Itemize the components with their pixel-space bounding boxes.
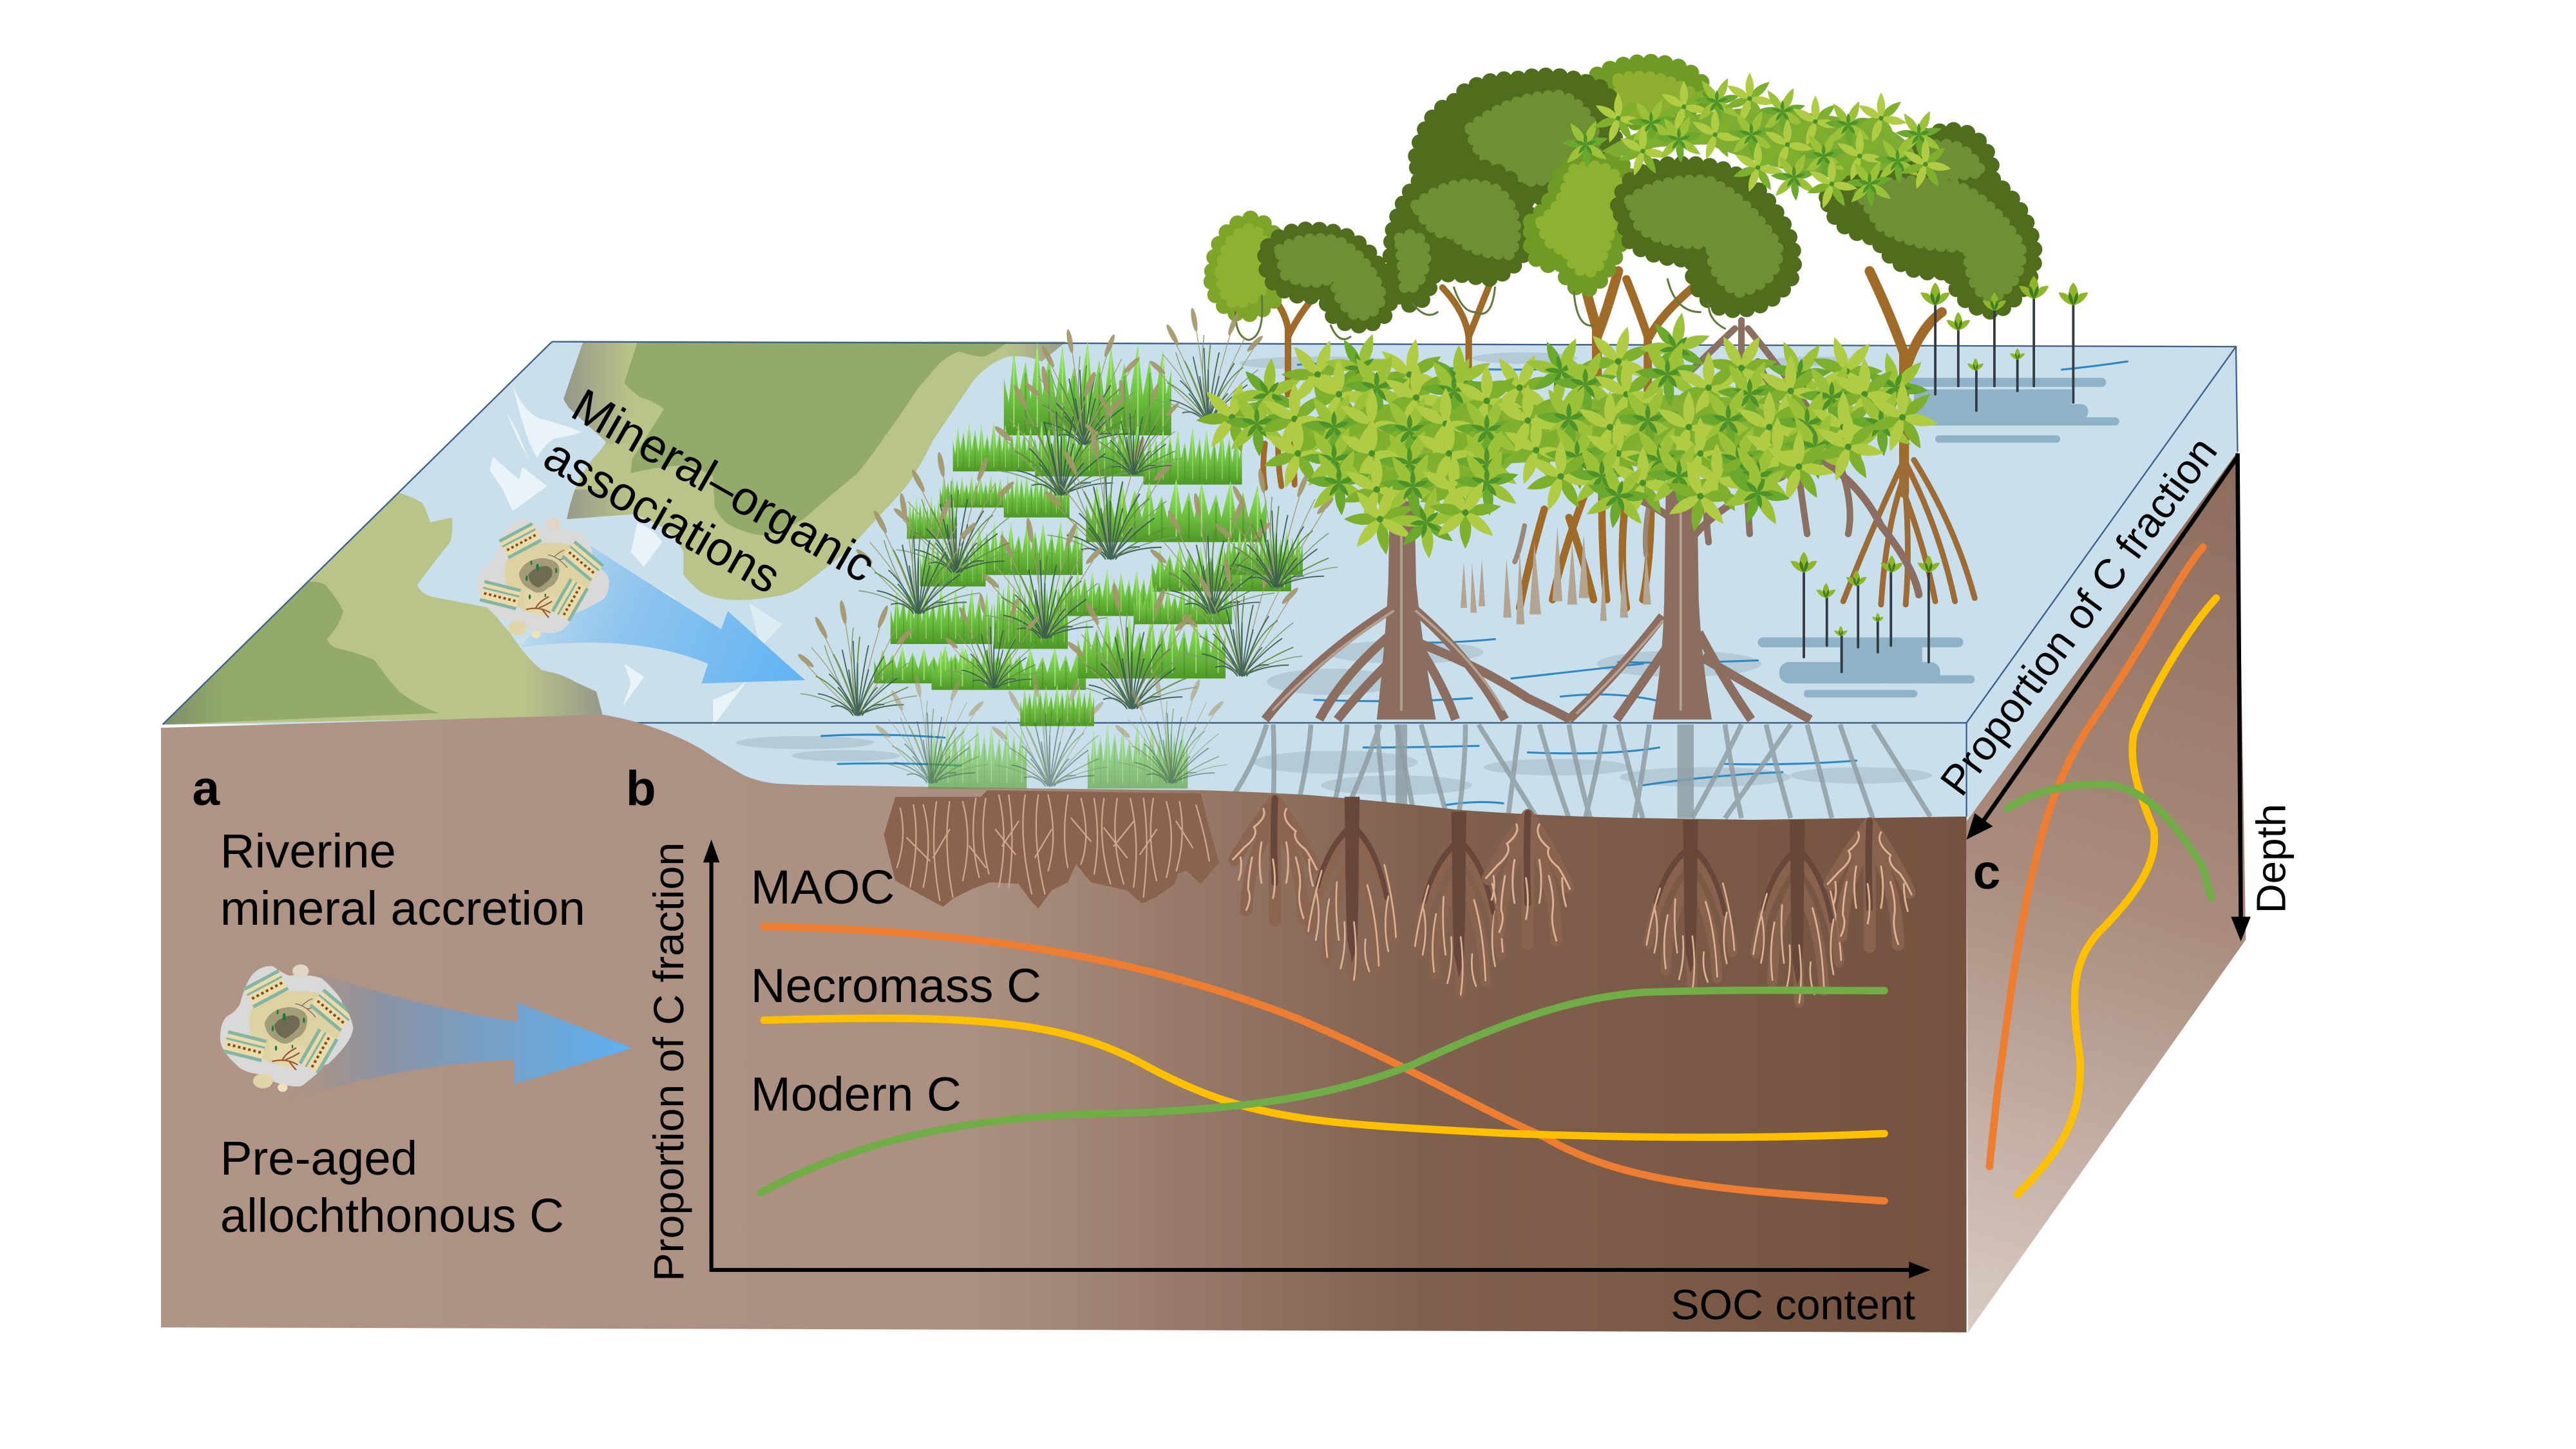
- seedlings: back right: [1920, 276, 2088, 411]
- land: upper bank: [558, 342, 1071, 600]
- foreground mangrove canopy leaves: [1188, 300, 1939, 569]
- text: mineral-organic associations: Mineral–organic: [564, 378, 884, 592]
- y axis title: Proportion of C fraction: [645, 842, 693, 1282]
- foreground mangrove trunks and roots: [1265, 452, 1919, 719]
- canopy: big top dark: [1416, 76, 1615, 201]
- water reflections of roots: [1224, 724, 1930, 818]
- puddles: front right: [1758, 638, 1975, 697]
- icon: mineral-organic aggregate on surface: [480, 518, 605, 638]
- seedlings: front right: [1790, 552, 1940, 672]
- curve: Modern C: [761, 990, 1884, 1193]
- icon: mineral-organic aggregate in soil: [223, 964, 355, 1092]
- grass marsh: [797, 308, 1338, 788]
- panel b label: b: [626, 761, 656, 816]
- curve: MAOC depth: [1989, 547, 2203, 1166]
- text: mineral-organic associations: associations: [535, 428, 790, 604]
- reed tufts in water: [874, 674, 1227, 786]
- text: riverine mineral accretion: mineral accretion: [220, 882, 585, 935]
- chart c: depth profile: [1931, 428, 2294, 1195]
- grass in shallow water: [928, 720, 1188, 788]
- label: Modern C: Modern C: [751, 1067, 961, 1121]
- depth axis title: Depth: [2248, 804, 2294, 913]
- panel c label: c: [1973, 845, 2000, 900]
- y axis: [703, 840, 719, 1271]
- water outline edges: [163, 342, 2237, 817]
- arrow: depth axis: [2231, 453, 2251, 942]
- mangrove roots underground: [1233, 797, 1911, 1003]
- vines: [1235, 279, 1725, 340]
- block side face c: [1967, 448, 2246, 1332]
- water surface top: [163, 342, 2236, 724]
- label: Necromass C: Necromass C: [751, 959, 1041, 1012]
- canopy: far left dark: [1265, 230, 1390, 325]
- chart b: SOC content vs proportion: [645, 840, 1930, 1329]
- text: pre-aged allochthonous C: Pre-aged: [220, 1132, 417, 1185]
- blue flow arrow on water surface: [521, 545, 805, 683]
- text: riverine mineral accretion: Riverine: [220, 824, 396, 878]
- land: lower-left bank: [163, 493, 606, 726]
- top arching canopy leaves: [1562, 73, 1952, 210]
- water side strip right: [1967, 346, 2237, 822]
- grass blocks: [874, 340, 1303, 726]
- canopy: second tree: [1391, 166, 1532, 305]
- puddles: back right: [1882, 378, 2119, 443]
- back mangrove trunks and roots: [1264, 271, 1975, 608]
- pneumatophore spikes: [1461, 526, 1651, 624]
- curve: modern depth: [2007, 784, 2211, 898]
- ripples on water: [736, 352, 2128, 805]
- canopy: far right tree: [1827, 130, 2034, 312]
- canopy: big top green: [1586, 62, 1709, 122]
- canopy: far left light: [1211, 218, 1278, 314]
- canopy: dark middle tree: [1618, 164, 1794, 310]
- curve: Necromass C: [764, 1018, 1884, 1137]
- label: MAOC: MAOC: [751, 860, 895, 914]
- soil front face: [161, 715, 1967, 1332]
- arrow: soil flow into panel b: [274, 971, 632, 1106]
- canopy: light middle tree: [1531, 158, 1633, 289]
- rotated axis title: Proportion of C fraction: [1931, 428, 2226, 804]
- curve: MAOC: [764, 927, 1884, 1201]
- arrow: proportion axis: [1967, 457, 2237, 840]
- curve: necromass depth: [2018, 598, 2216, 1195]
- reed tufts: [797, 308, 1338, 715]
- text: pre-aged allochthonous C: allochthonous C: [220, 1189, 564, 1242]
- back canopy foliage: [1211, 62, 2034, 340]
- white foam streaks: [489, 384, 782, 726]
- grass roots underground: [884, 790, 1219, 909]
- x axis: [710, 1262, 1930, 1278]
- panel a label: a: [192, 761, 220, 816]
- x axis title: SOC content: [1671, 1281, 1915, 1329]
- water front strip: [591, 723, 1967, 825]
